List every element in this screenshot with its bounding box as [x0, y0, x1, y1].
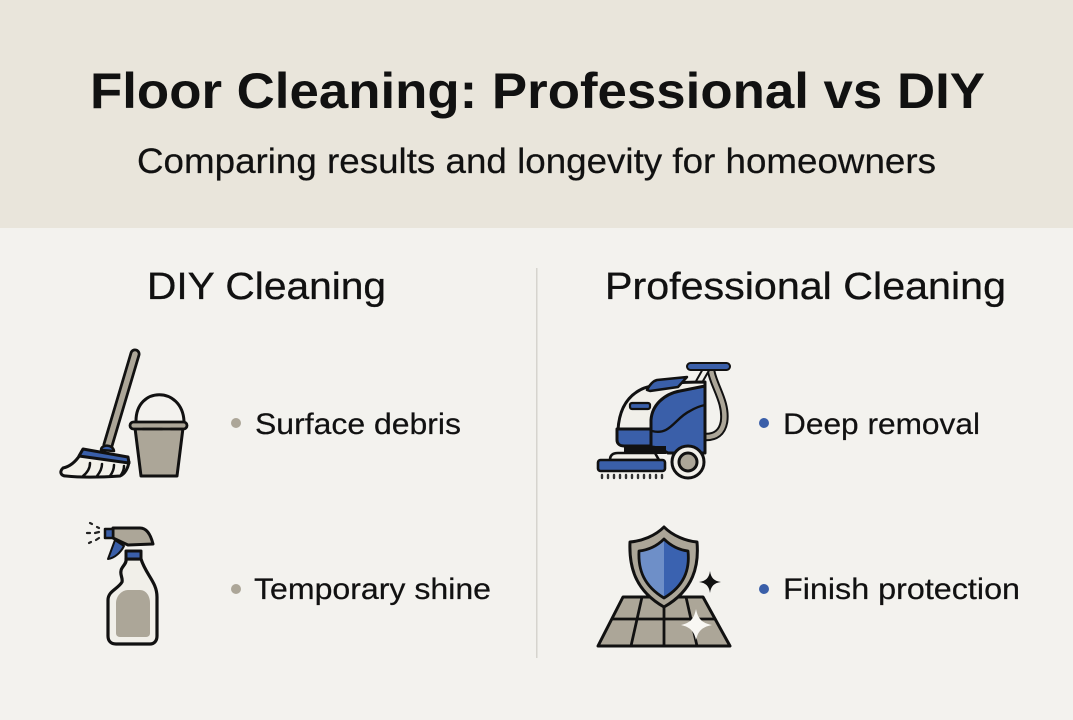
- icon: floor scrubber machine: [598, 363, 730, 478]
- icon: shield over floor tiles: [598, 527, 730, 646]
- bullet: finish protection: Finish protection: [783, 573, 1020, 606]
- bullet: surface debris: Surface debris: [255, 408, 461, 441]
- title: Floor Cleaning: Professional vs DIY: [90, 63, 985, 119]
- panel: DIY cleaning: [61, 266, 491, 644]
- panel: professional cleaning: [598, 266, 1020, 646]
- icon: spray bottle: [87, 523, 157, 644]
- heading: DIY Cleaning: DIY Cleaning: [147, 266, 386, 308]
- heading: Professional Cleaning: Professional Cleaning: [605, 266, 1006, 308]
- icon: mop and bucket: [61, 354, 187, 477]
- bullet: temporary shine: Temporary shine: [254, 573, 491, 606]
- bullet: deep removal: Deep removal: [783, 408, 980, 441]
- subtitle: Comparing results and longevity for homeowners: [137, 142, 936, 181]
- header band: [0, 0, 1073, 228]
